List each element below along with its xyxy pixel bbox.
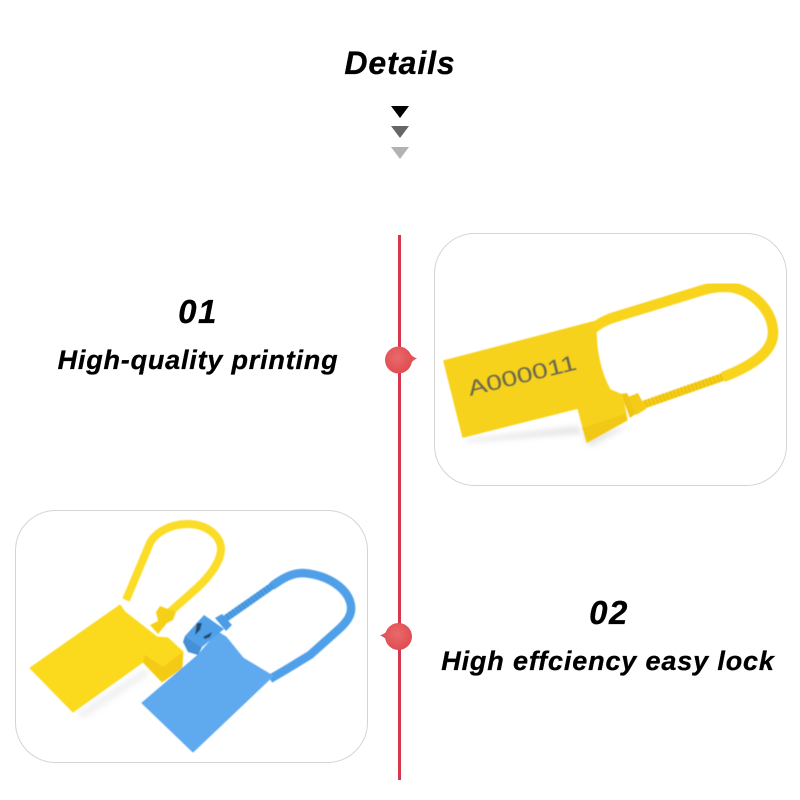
tag body [444, 322, 627, 442]
lock block front face [582, 414, 627, 442]
marker: point 01 [385, 346, 417, 374]
panel: yellow seal photo [434, 234, 786, 486]
panel: yellow and blue seals photo [16, 510, 368, 762]
collar [621, 393, 646, 418]
serial number: A000011 [465, 351, 579, 401]
text: high-quality printing: High-quality printing [58, 345, 338, 375]
heading: 01: 01 [178, 293, 218, 330]
timeline line [398, 235, 401, 780]
shadows [75, 668, 150, 718]
title: Details [344, 45, 456, 81]
shackle [590, 287, 773, 377]
shadow [463, 425, 630, 447]
blue collar [215, 614, 232, 631]
blue tag [142, 632, 273, 752]
yellow lock tip [150, 606, 176, 634]
blue lock block [183, 615, 224, 655]
yellow shackle [126, 524, 221, 612]
yellow tag [30, 605, 183, 712]
yellow lock front face [143, 652, 183, 682]
serrated strap [640, 377, 723, 406]
marker: point 02 [380, 623, 412, 650]
text: high efficiency easy lock: High effciency easy lock [441, 646, 775, 676]
blue shackle [270, 573, 351, 679]
blue strap [222, 586, 272, 621]
icon: triangle arrows [391, 106, 409, 159]
heading: 02: 02 [589, 594, 629, 631]
